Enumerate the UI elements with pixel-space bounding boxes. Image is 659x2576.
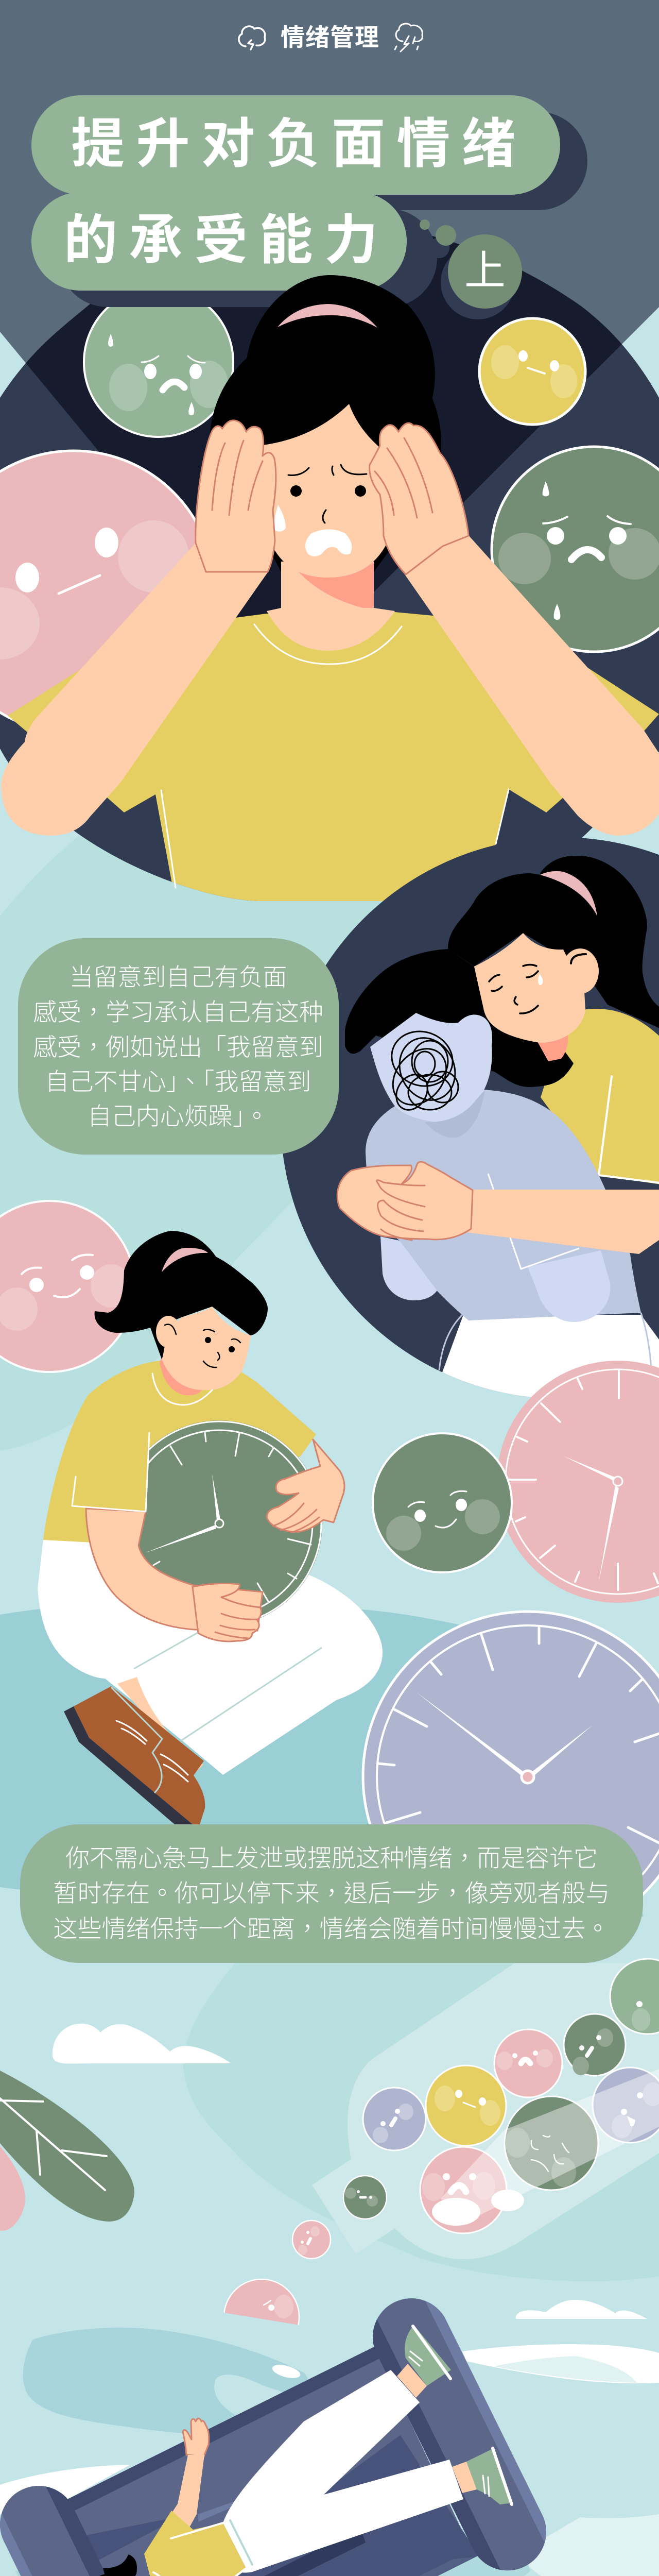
collar: [254, 624, 402, 664]
big navy circle: [0, 222, 659, 901]
white trousers: [442, 1315, 659, 1397]
back figure head: [370, 1013, 492, 1122]
collar: [152, 1374, 212, 1405]
emoji: dark green top: [564, 2014, 626, 2076]
leaf green: [0, 2071, 134, 2222]
emoji: small pink: [292, 2221, 331, 2259]
shirt lines: [153, 2523, 246, 2576]
front face: [537, 1035, 568, 1061]
pale sleeve right: [528, 1250, 610, 1322]
lower hand: [193, 1583, 262, 1641]
shirt: [144, 2511, 246, 2576]
clock: pink: [497, 1361, 659, 1603]
pale waves lower right: [515, 2514, 659, 2576]
headband: [278, 304, 377, 328]
emoji: big green: [505, 2096, 598, 2190]
front figure ponytail: [540, 856, 659, 1030]
emoji: half pink: [223, 2278, 300, 2325]
ponytail and hair: [95, 1231, 216, 1359]
text 1: [33, 963, 323, 1130]
leaf pink: [0, 2146, 25, 2231]
emoji: purple: [363, 2088, 426, 2150]
text 1: 当留意到自己有负面: [69, 963, 287, 991]
back figure hair: [345, 949, 574, 1087]
scribble: [391, 1030, 459, 1111]
foam: [271, 2362, 302, 2381]
person: girl holding clock: [38, 1231, 383, 1824]
text 2: [54, 1844, 610, 1942]
emoji: green crying: [84, 287, 233, 437]
right arm: [267, 1439, 344, 1532]
circle: second scene backdrop: [281, 837, 659, 1399]
shoe sole: [64, 1706, 193, 1824]
white foam ellipses: [432, 2198, 480, 2226]
emoji: yellow neutral: [479, 318, 585, 425]
trousers: [223, 2370, 463, 2573]
dark overlap wedge: [26, 236, 622, 618]
sea shape: [23, 2328, 309, 2434]
icon: storm cloud right: [395, 24, 423, 52]
title pill: [31, 95, 560, 291]
text 1: 感受，学习承认自己有这种: [33, 998, 323, 1026]
white waves: [462, 2344, 659, 2383]
face: [162, 1307, 251, 1390]
text 2: 暂时存在。你可以停下来，退后一步，像旁观者般与: [54, 1879, 610, 1907]
floating bed: [0, 2285, 559, 2576]
neck: [281, 562, 374, 618]
raised hand: [183, 2418, 209, 2456]
sleeve line: [599, 1076, 659, 1183]
background blob ground: [0, 1603, 644, 1917]
face: [263, 404, 396, 578]
foot top: [397, 2364, 427, 2398]
front figure head hair: [448, 873, 571, 967]
text 1: 感受，例如说出「我留意到: [33, 1033, 323, 1061]
hair: [84, 2573, 137, 2576]
left roll: [0, 2486, 105, 2576]
hair: [246, 275, 435, 474]
title line 1: 提升对负面情绪: [71, 114, 527, 174]
translucent light beam: [440, 2069, 659, 2215]
person floating on bed: [84, 2325, 513, 2576]
pale arm left: [380, 1236, 437, 1300]
clock body: [116, 1420, 322, 1626]
headband over title: [278, 304, 377, 328]
big green face lines: [531, 2136, 569, 2172]
arms: [1, 515, 273, 836]
emoji: big pink: [420, 2147, 507, 2233]
text 2: 你不需心急马上发泄或摆脱这种情绪，而是容许它: [65, 1844, 598, 1872]
bed shadow: [15, 2524, 530, 2576]
emoji group: [224, 1959, 659, 2354]
hair over title: [246, 275, 412, 375]
raised arm: [171, 2455, 204, 2535]
shirt: [43, 1361, 316, 1546]
cloud: [53, 2024, 231, 2064]
cloud small right: [516, 2300, 647, 2319]
title line 2: 的承受能力: [64, 211, 390, 270]
light thought shape: [312, 1963, 659, 2259]
emoji: pink top: [494, 2029, 562, 2097]
text 2: 这些情绪保持一个距离，情绪会随着时间慢慢过去。: [54, 1915, 610, 1942]
person: worried woman: [1, 275, 659, 907]
right roll: [373, 2298, 546, 2571]
trousers: [38, 1520, 383, 1775]
mat: [67, 2347, 475, 2576]
left hand: [196, 420, 276, 572]
background blob band: [183, 1963, 659, 2281]
emoji: pink smiling: [0, 1201, 135, 1372]
top slate background: [0, 0, 659, 679]
heading: section label: 情绪管理: [281, 24, 379, 51]
leaf veins: [0, 2098, 107, 2190]
text panel 2: [20, 1824, 643, 1963]
shoe bottom: [466, 2448, 513, 2504]
sleeve: [72, 1432, 149, 1512]
back figure body: [366, 1090, 641, 1320]
clock: purple: [363, 1612, 659, 1941]
text 1: 自己不甘心」、「我留意到: [45, 1068, 311, 1095]
text 1: 自己内心烦躁」。: [88, 1103, 269, 1130]
emoji: small green: [343, 2176, 387, 2219]
emoji: dark green sad: [492, 447, 659, 652]
text panel 1: [18, 938, 339, 1155]
icon: cloud left: [239, 26, 265, 49]
foot bottom: [452, 2462, 477, 2493]
illustration: hugging figures: [337, 856, 659, 1443]
emoji: big pink: [0, 451, 215, 733]
shoe: [74, 1686, 205, 1824]
right hand: [370, 423, 469, 574]
part marker: 上: [464, 248, 506, 294]
emoji: green smiling: [373, 1433, 512, 1572]
emoji: purple right: [593, 2067, 659, 2143]
ankle: [117, 1677, 203, 1772]
arm left with sleeve: [86, 1509, 263, 1631]
emoji: green top right: [610, 1959, 659, 2034]
shoe top: [405, 2325, 451, 2386]
emoji: yellow: [426, 2065, 506, 2146]
hands: [337, 1162, 473, 1240]
headband: [540, 871, 597, 916]
part marker: [420, 219, 522, 309]
yellow shirt: [541, 1009, 659, 1185]
headband: [162, 1248, 208, 1272]
neck shade: [160, 1340, 202, 1395]
background blob upper: [0, 788, 515, 1451]
face features: [290, 485, 302, 497]
shirt and sleeves: [8, 612, 659, 907]
title badge shadows: [59, 112, 587, 319]
front figure arm: [463, 1190, 659, 1254]
